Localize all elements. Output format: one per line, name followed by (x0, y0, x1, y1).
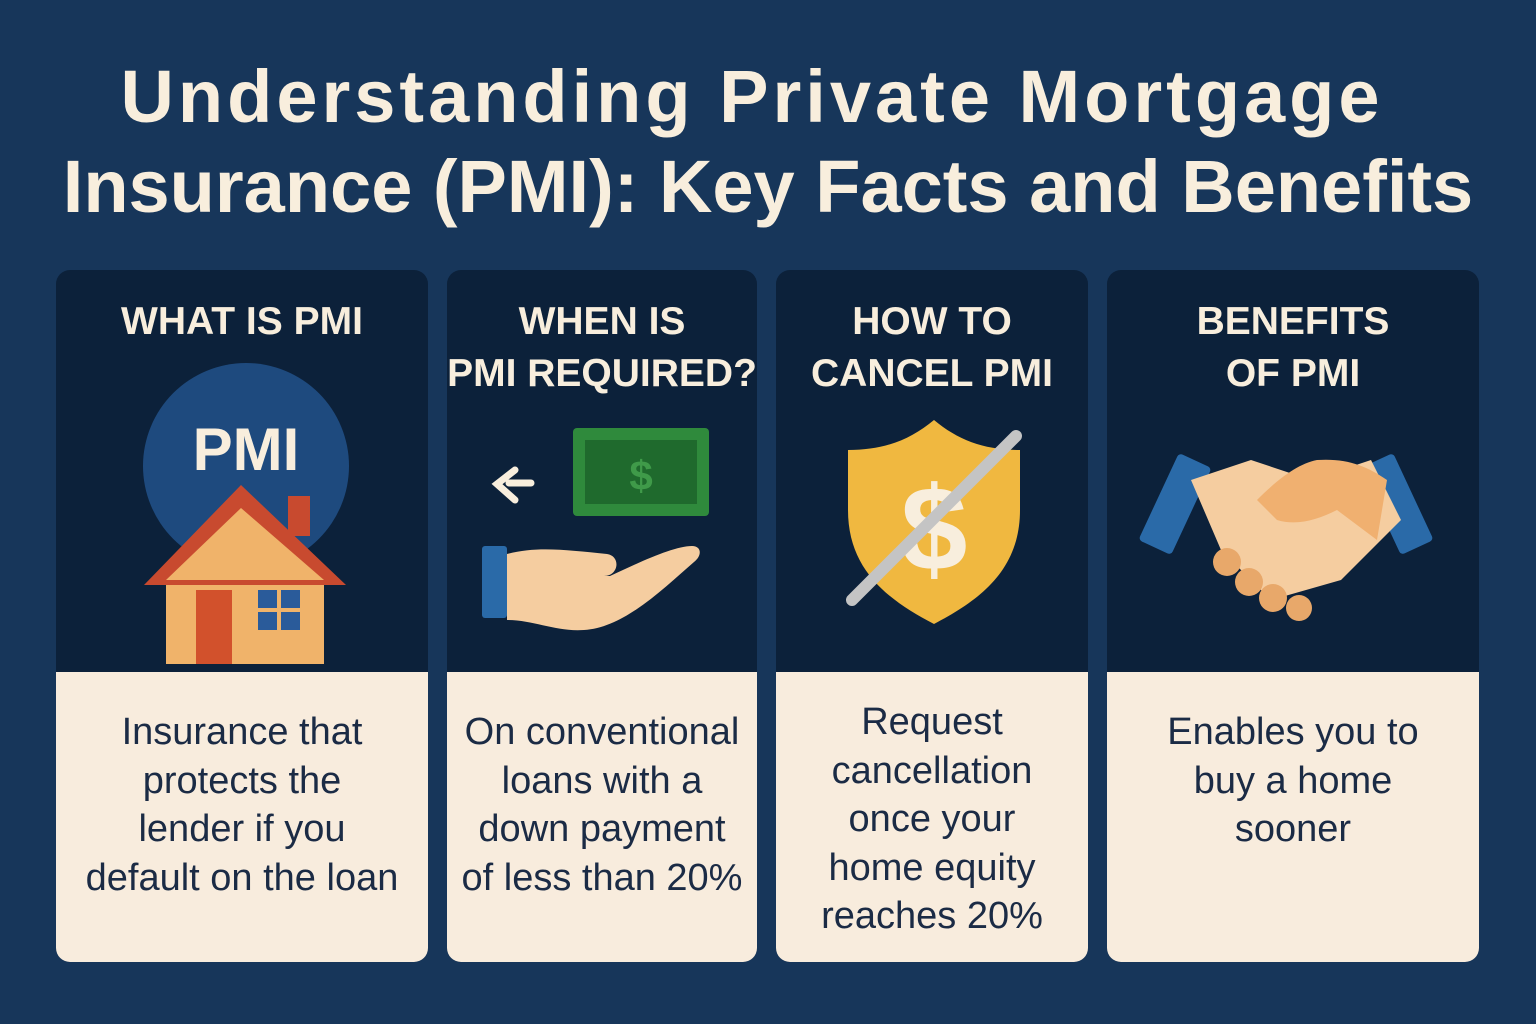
text (462, 711, 742, 898)
heading (811, 300, 1053, 395)
text: lender if you (138, 808, 346, 850)
text: default on the loan (86, 856, 398, 898)
heading (447, 300, 757, 395)
heading: WHAT IS PMI (121, 300, 363, 343)
text: On conventional (465, 711, 739, 753)
icon: shield slash: $ (901, 462, 967, 596)
heading: WHEN IS (519, 300, 685, 343)
heading: PMI REQUIRED? (447, 352, 757, 395)
heading: CANCEL PMI (811, 352, 1053, 395)
text (86, 711, 398, 898)
text: Request (861, 701, 1003, 743)
icon: PMI house (143, 363, 349, 664)
title (63, 55, 1473, 228)
text: reaches 20% (821, 895, 1043, 937)
text: Insurance that (122, 711, 362, 753)
text: Enables you to (1167, 711, 1419, 753)
heading: OF PMI (1226, 352, 1360, 395)
text: sooner (1235, 808, 1351, 850)
icon: handshake (1140, 454, 1432, 621)
icon: money hand (482, 428, 709, 630)
icon: money hand: $ (629, 452, 653, 499)
heading: HOW TO (852, 300, 1012, 343)
text: buy a home (1194, 760, 1392, 802)
text: cancellation (832, 750, 1032, 792)
icon: shield slash (846, 420, 1022, 624)
title: Insurance (PMI): Key Facts and Benefits (63, 145, 1473, 228)
text: once your (849, 798, 1015, 840)
text (821, 701, 1043, 937)
text: down payment (478, 808, 726, 850)
heading (1197, 300, 1389, 395)
heading: BENEFITS (1197, 300, 1389, 343)
panel: benefits (1107, 270, 1479, 962)
text: home equity (828, 846, 1036, 888)
panel: how to cancel (776, 270, 1088, 962)
icon: PMI house: PMI (193, 416, 299, 483)
title: Understanding Private Mortgage (120, 55, 1384, 138)
text: loans with a (502, 760, 702, 802)
text: of less than 20% (462, 856, 742, 898)
text (1167, 711, 1419, 850)
panel: when is PMI required (447, 270, 757, 962)
panel: what is PMI (56, 270, 428, 962)
text: protects the (143, 760, 341, 802)
